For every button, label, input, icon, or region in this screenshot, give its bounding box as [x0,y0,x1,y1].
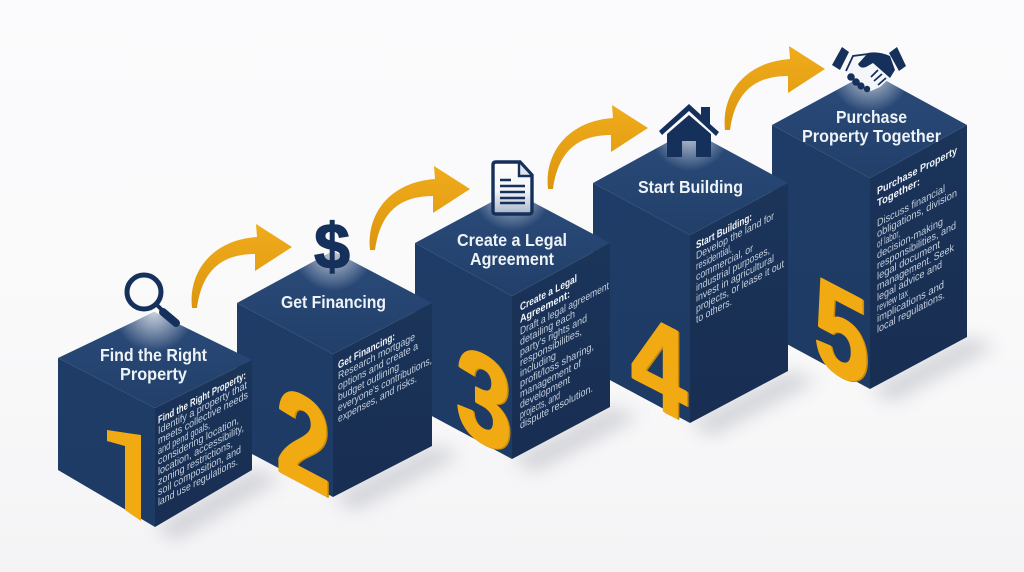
panel: step 2 get financing [237,251,432,525]
text block: step 3 description: Draft a legal agreement [520,280,610,338]
arrow: step 1 to 2 [192,224,292,308]
text block: step 5 description: Purchase Property [877,145,957,198]
text block: step 2 description: Research mortgage [338,331,415,383]
number 3: 3 [456,315,512,484]
heading: create a legal agreement [457,230,567,269]
text block: step 2 description: expenses, and risks. [338,373,417,425]
text block: step 5 description: Together: [877,176,920,210]
number 4: 4 [631,281,687,450]
heading: find the right property: Property [120,364,187,384]
text block: step 1 description [158,369,248,509]
text block: step 5 description: local regulations. [877,289,945,336]
text block: step 5 description [877,145,957,336]
number 1 [107,430,141,521]
heading: start building: Start Building [638,177,743,197]
heading: get financing: Get Financing [281,292,386,312]
text block: step 5 description: obligations, division [877,188,957,240]
text block: step 3 description: detailing each [520,308,575,348]
arrow: step 4 to 5 [725,46,825,130]
text block: step 5 description: review tax [877,287,908,315]
text block: step 1 description: and pend goals, [158,419,210,458]
text block: step 4 description: projects, or lease it out [696,258,785,315]
heading: purchase property together: Purchase [836,107,907,127]
text block: step 5 description: management. Seek [877,242,954,293]
text block: step 1 description: considering location, [158,414,239,468]
text block: step 5 description: responsibilities, and [877,220,956,272]
text block: step 2 description: budget outlining [338,361,399,404]
text block: step 4 description: industrial purposes, [696,244,770,294]
panel: step 4 start building [593,130,788,451]
text block: step 3 description: including [520,350,556,380]
text block: step 3 description: dispute resolution. [520,383,593,432]
text block: step 5 description: legal document [877,238,941,283]
text block: step 5 description: of labor, [877,228,900,251]
icon: handshake [832,47,906,92]
text block: step 4 description: Develop the land for [696,211,774,262]
text block: step 5 description: decision-making [877,216,943,262]
number 5: 5 [814,247,868,416]
text block: step 4 description: to others. [696,296,732,326]
text block: step 4 description [696,194,785,326]
text block: step 2 description: Get Financing: [338,331,395,372]
text block: step 5 description: implications and [877,279,944,325]
text block: step 1 description: soil composition, and [158,444,241,499]
number 1: 1 [92,399,162,546]
text block: step 3 description: profit/loss sharing, [520,341,594,390]
number 5: 5 [816,248,870,417]
text block: step 3 description [520,256,610,432]
text block: step 4 description: residential, [696,243,732,273]
text block: step 2 description: options and create a [338,340,418,393]
icon: house [659,104,719,157]
text block: step 3 description: responsibilities, [520,326,582,369]
heading: purchase property together [802,107,941,146]
panel: step 3 create a legal agreement [415,191,610,485]
text block: step 1 description: Identify a property that [158,379,248,437]
heading: find the right property: Find the Right [100,345,207,365]
panel: step 1 find the right property [58,312,252,546]
text block: step 1 description: land use regulations. [158,456,238,509]
text block: step 4 description: Start Building: [696,211,752,252]
heading: find the right property [100,345,207,384]
text block: step 5 description: Discuss financial [877,183,945,230]
text block: step 3 description: party's rights and [520,313,587,359]
arrow: step 2 to 3 [370,166,470,250]
icon: dollar sign: $ [314,210,350,282]
icon: document [493,162,532,214]
text block: step 2 description: everyone's contributions, [338,354,432,415]
number 3: 3 [458,316,513,485]
text block: step 1 description: Find the Right Property: [158,370,246,427]
heading: create a legal agreement: Agreement [470,249,554,269]
text block: step 1 description: location, accessibility, [158,422,244,478]
number 4: 4 [632,282,688,451]
number 2: 2 [278,356,332,525]
text block: step 5 description: legal advice and [877,259,942,304]
text block: step 4 description: commercial, or [696,243,753,284]
text block: step 2 description [338,312,432,425]
panel: step 5 purchase property together [772,72,967,417]
text block: step 3 description: Agreement: [520,289,570,326]
text block: step 4 description: invest in agricultural [696,253,774,305]
heading: create a legal agreement: Create a Legal [457,230,567,250]
icon: magnifying glass [127,275,176,323]
arrow: step 3 to 4 [548,105,648,189]
heading: purchase property together: Property Together [802,126,941,146]
text block: step 3 description: development [520,374,571,411]
text block: step 1 description: meets collective needs [158,389,248,447]
number 2: 2 [276,355,330,524]
text block: step 3 description: projects, and [520,390,560,422]
text block: step 3 description: management of [520,358,582,401]
text block: step 3 description: Create a Legal [520,273,577,314]
text block: step 1 description: zoning restrictions, [158,438,233,488]
